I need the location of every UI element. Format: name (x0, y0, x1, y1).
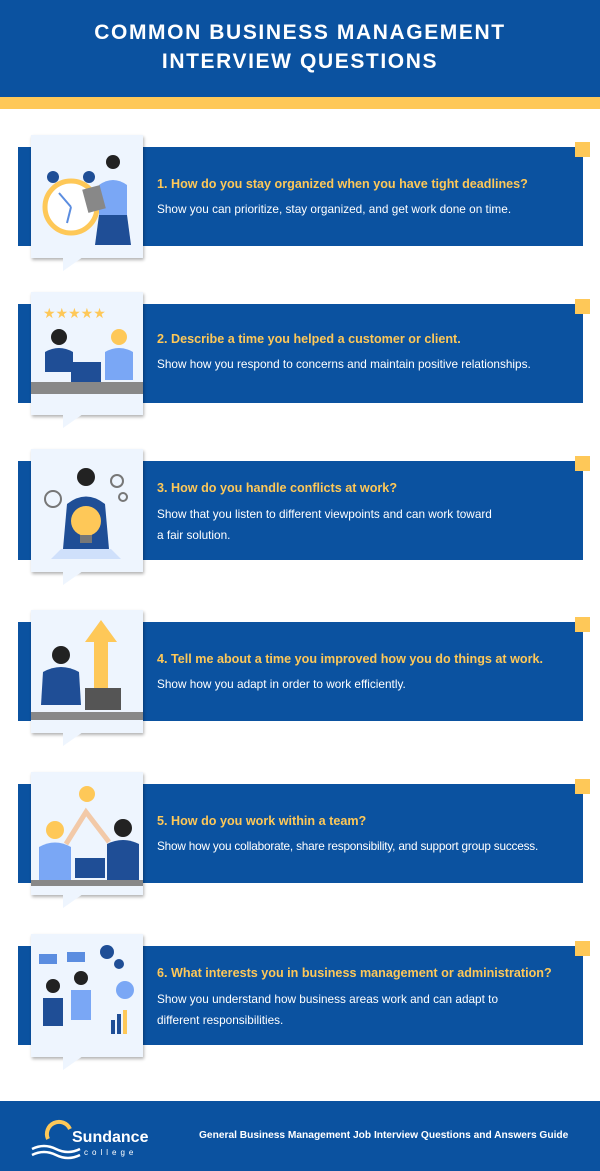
footer text: General Business Management Job Interview Questions and Answers Guide (199, 1130, 568, 1141)
footer (0, 1101, 600, 1171)
icon: lightbulb woman (31, 449, 143, 572)
question text: 1. How do you stay organized when you have tight deadlines? (157, 177, 528, 191)
panel: question 3 (18, 449, 590, 585)
panel: question 4 (18, 610, 590, 746)
panel: question 5 (18, 772, 590, 908)
panel: question 6: 6. What interests you in business management or administration? (157, 966, 552, 980)
panel: question 6: different responsibilities. (157, 1013, 283, 1027)
icon: clock and woman (31, 135, 143, 258)
header (0, 0, 600, 97)
icon: business people with charts (31, 934, 143, 1057)
panel: question 4: 4. Tell me about a time you improved how you do things at work. (157, 652, 543, 666)
panel: question 2: 2. Describe a time you helped a customer or client. (157, 332, 461, 346)
header: COMMON BUSINESS MANAGEMENT (94, 21, 506, 44)
panel: question 3: 3. How do you handle conflicts at work? (157, 481, 397, 495)
logo: Sundance college (32, 1120, 149, 1160)
logo: Sundance college: college (84, 1148, 137, 1157)
panel: question 2 (18, 292, 590, 428)
header: INTERVIEW QUESTIONS (162, 50, 438, 73)
panel: question 6: Show you understand how business areas work and can adapt to (157, 992, 498, 1006)
icon: customer meeting: ★★★★★ (43, 305, 106, 321)
panel: question 3: a fair solution. (157, 528, 230, 542)
panel: question 6 (18, 934, 590, 1070)
panel: question 5: Show how you collaborate, share responsibility, and support group success. (157, 839, 538, 853)
icon: improvement arrow (31, 610, 143, 733)
answer text: Show you can prioritize, stay organized, and get work done on time. (157, 202, 511, 216)
panel: question 4: Show how you adapt in order to work efficiently. (157, 677, 406, 691)
panel: question 1 (18, 135, 590, 271)
panel: question 3: Show that you listen to different viewpoints and can work toward (157, 507, 492, 521)
icon: customer meeting (31, 292, 143, 415)
panel: question 5: 5. How do you work within a team? (157, 814, 366, 828)
icon: teamwork high five (31, 772, 143, 895)
panel: question 2: Show how you respond to concerns and maintain positive relationships. (157, 357, 531, 371)
logo: Sundance college: Sundance (72, 1129, 149, 1146)
